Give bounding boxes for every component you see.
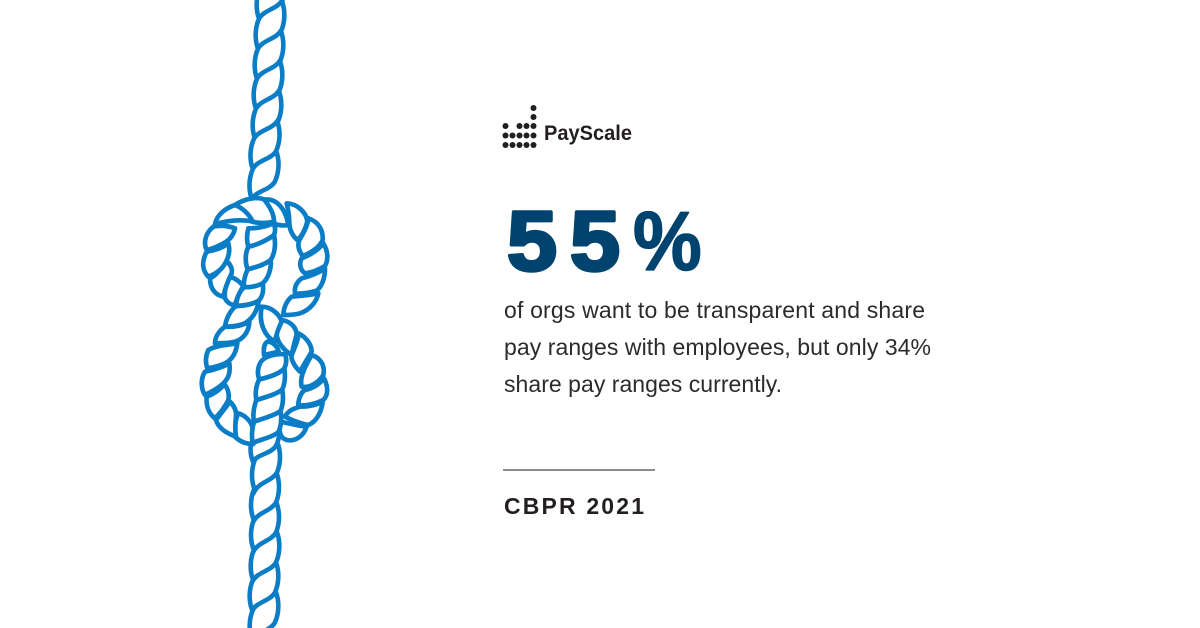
top arc strands bbox=[215, 198, 307, 240]
icon: rope tied in a figure-eight knot bbox=[202, 0, 327, 628]
knot: lower loop right strands and central rope bbox=[252, 307, 327, 443]
knot: lower loop strands bbox=[202, 301, 259, 444]
top rope bbox=[249, 0, 286, 200]
big statistic bbox=[507, 195, 702, 289]
lower-left strands bbox=[202, 301, 259, 444]
central lower rope strands bbox=[252, 342, 286, 443]
source label: CBPR 2021 bbox=[504, 493, 644, 519]
upper arc of lower-right loop bbox=[261, 307, 312, 372]
upper-left strands bbox=[203, 226, 243, 305]
central strands bbox=[236, 223, 275, 306]
logo wordmark: PayScale bbox=[544, 122, 632, 145]
body text: share pay ranges currently. bbox=[504, 371, 782, 397]
right strands of upper loop bbox=[283, 218, 327, 315]
big statistic: % bbox=[633, 195, 702, 289]
knot: upper loop right strands and top arc bbox=[215, 198, 327, 315]
knot: upper-left loop lower strands and central strand bbox=[203, 223, 275, 306]
body text: of orgs want to be transparent and share bbox=[504, 297, 925, 323]
logo: PayScale bbox=[502, 105, 632, 148]
right strands of lower loop bbox=[280, 355, 327, 440]
big statistic: 5 bbox=[570, 195, 620, 288]
bottom rope bbox=[249, 417, 280, 628]
icon: logo dots bbox=[502, 105, 536, 148]
body text: pay ranges with employees, but only 34% bbox=[504, 334, 931, 360]
big statistic: 5 bbox=[507, 195, 557, 288]
body text bbox=[504, 297, 931, 397]
divider bbox=[503, 469, 655, 471]
